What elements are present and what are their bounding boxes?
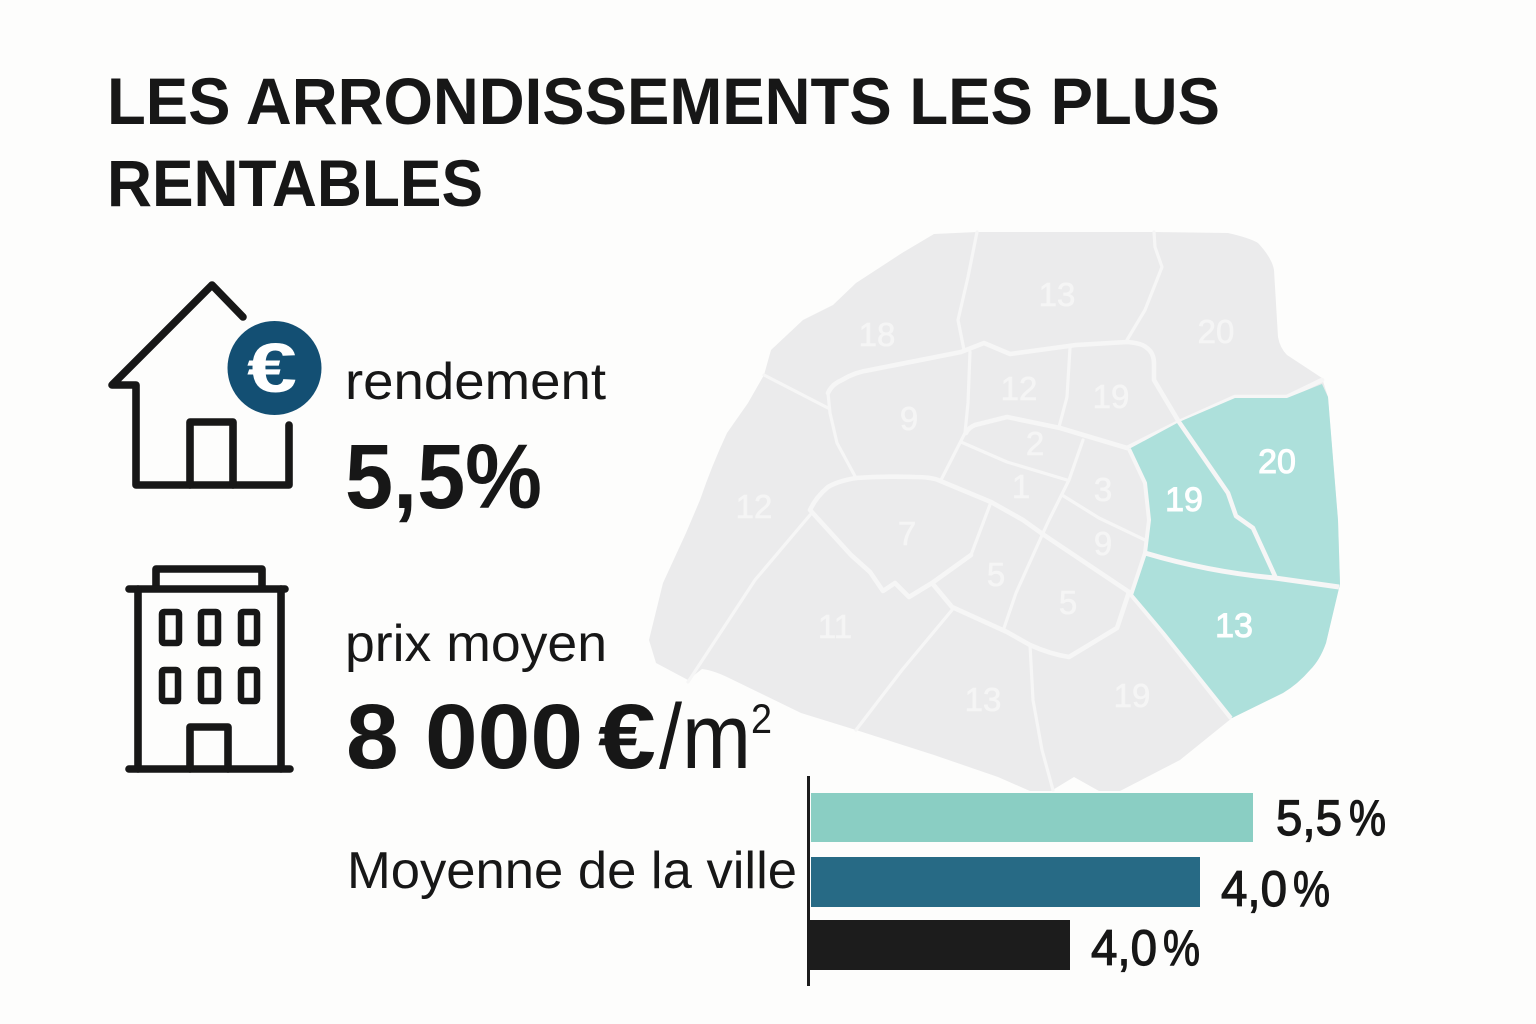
text: average price value: 2 xyxy=(751,695,772,742)
map: district numbers: 20 xyxy=(1198,313,1234,350)
map: district numbers: 13 xyxy=(965,681,1001,718)
map: district numbers: 12 xyxy=(736,488,772,525)
title xyxy=(107,64,1220,220)
bar: 4,0 % black xyxy=(808,920,1200,976)
map: district numbers: 12 xyxy=(1001,370,1037,407)
title: RENTABLES xyxy=(107,146,483,220)
text: city average label: Moyenne de la ville xyxy=(347,842,797,900)
text: average price label: prix moyen xyxy=(345,615,607,673)
map: district numbers: 18 xyxy=(859,316,895,353)
map: grey base shape xyxy=(649,232,1340,791)
icon: house with euro badge xyxy=(112,285,322,485)
chart axis xyxy=(807,776,810,986)
map: district numbers: 11 xyxy=(818,608,852,645)
map: district numbers xyxy=(736,276,1296,718)
map: district numbers: 5 xyxy=(1059,584,1077,621)
title: LES ARRONDISSEMENTS LES PLUS xyxy=(107,64,1220,138)
map: district numbers: 13 xyxy=(1215,607,1253,645)
map: district numbers: 9 xyxy=(1094,525,1112,562)
bar: 4,0 % black: 4,0 xyxy=(1091,920,1157,976)
text: average price value xyxy=(346,686,772,788)
map: district numbers: 19 xyxy=(1093,378,1129,415)
bar chart xyxy=(807,776,1386,986)
map: interior district boundaries xyxy=(688,232,1322,790)
bar: 4,0 % black: % xyxy=(1163,920,1200,976)
icon: house with euro badge: € xyxy=(247,329,297,407)
text: average price value: 8 000 xyxy=(346,686,583,788)
map: district numbers: 5 xyxy=(987,556,1005,593)
text: average price value: /m xyxy=(659,686,751,788)
map: district numbers: 1 xyxy=(1012,468,1030,505)
map: district numbers: 3 xyxy=(1094,471,1112,508)
bar: 5,5 % xyxy=(811,790,1386,846)
map: district numbers: 20 xyxy=(1258,443,1296,481)
bar: 5,5 %: 5,5 xyxy=(1276,790,1342,846)
map: district numbers: 13 xyxy=(1039,276,1075,313)
bar: 4,0 % blue: 4,0 xyxy=(1221,861,1287,917)
icon: apartment building xyxy=(129,569,290,769)
map: district numbers: 2 xyxy=(1026,425,1044,462)
bar: 5,5 %: % xyxy=(1349,790,1386,846)
map: district numbers: 9 xyxy=(900,400,918,437)
text: yield value: 5,5% xyxy=(345,426,542,528)
text: average price value: € xyxy=(598,686,656,788)
bar: 4,0 % blue: % xyxy=(1293,861,1330,917)
map: highlighted districts 19, 20 and 13 xyxy=(1129,384,1340,718)
map of arrondissements xyxy=(649,232,1340,791)
map: district numbers: 19 xyxy=(1165,481,1203,519)
map: district numbers: 7 xyxy=(898,515,916,552)
map: district numbers: 19 xyxy=(1114,677,1150,714)
text: yield label: rendement xyxy=(345,353,607,411)
bar: 4,0 % blue xyxy=(811,857,1330,917)
